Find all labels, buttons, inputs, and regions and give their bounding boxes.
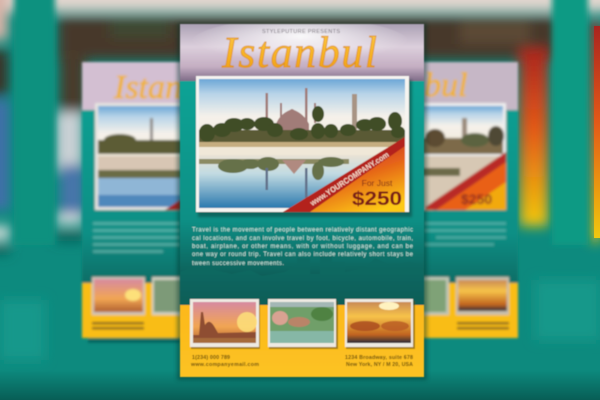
contact phone and email: [190, 355, 259, 368]
teal columns in background: [14, 0, 588, 245]
header band: [180, 18, 424, 81]
bottom shading: [0, 370, 600, 400]
company url: www.YOURCOMPANY.com: [308, 150, 391, 208]
body text: one way or round trip. Travel can also include relatively short stays be: [192, 252, 414, 258]
for just label: For Just: [362, 178, 393, 188]
main flyer shadow: [177, 23, 427, 380]
red diagonal band: [283, 137, 405, 212]
back flyer left: [82, 62, 183, 343]
back flyer right text: [424, 222, 506, 246]
body text: tween successive movements.: [192, 261, 284, 267]
reflection: [199, 157, 349, 198]
pool bank: [199, 142, 405, 147]
back flyer right title: bul: [424, 67, 467, 104]
back flyer left title: Istan: [113, 69, 182, 106]
back flyer left footer: [82, 283, 182, 338]
thumbnail: coastal town: [268, 299, 338, 349]
teal body: [180, 80, 424, 306]
body text: [192, 228, 414, 267]
title: Istanbul: [221, 28, 377, 77]
contact phone and email: 1(234) 000 789: [192, 355, 230, 361]
back flyer right price: $250: [461, 191, 492, 207]
contact phone and email: www.companyemail.com: [190, 362, 259, 368]
price triangle: [283, 137, 405, 212]
contact address: 1234 Broadway, suite 678: [345, 355, 413, 361]
back flyer right thumbnails: [420, 277, 509, 315]
main photo: [196, 76, 412, 217]
body text: cal locations, and can involve travel by foot, bicycle, automobile, train,: [192, 236, 413, 242]
body text: Travel is the movement of people between relatively distant geographic: [192, 228, 413, 234]
back flyer left photo: [95, 103, 183, 210]
mosque: [266, 88, 316, 130]
thumbnail: sunset mosque: [190, 299, 260, 349]
contact address: [345, 355, 413, 368]
back flyer right photo: [420, 103, 506, 210]
main flyer: [180, 18, 424, 377]
back flyer right: [420, 62, 518, 338]
city skyline silhouette: [180, 256, 424, 305]
thumbnail: sunset town: [345, 299, 415, 349]
back flyer left header: [82, 62, 182, 110]
body text: boat, airplane, or other means, with or without luggage, and can be: [192, 244, 414, 250]
back flyer right header: [420, 62, 518, 110]
back flyer left text: [93, 222, 180, 253]
right edge colour strip: [594, 26, 600, 238]
contact address: New York, NY / M 20, USA: [346, 362, 413, 368]
back flyer left thumbnails: [92, 277, 182, 315]
price: $250: [352, 189, 402, 210]
yellow footer: [180, 305, 424, 377]
palm trees: [199, 106, 405, 142]
back flyer right footer: [420, 283, 518, 338]
presenter line: STYLEPUTURE PRESENTS: [262, 29, 340, 35]
